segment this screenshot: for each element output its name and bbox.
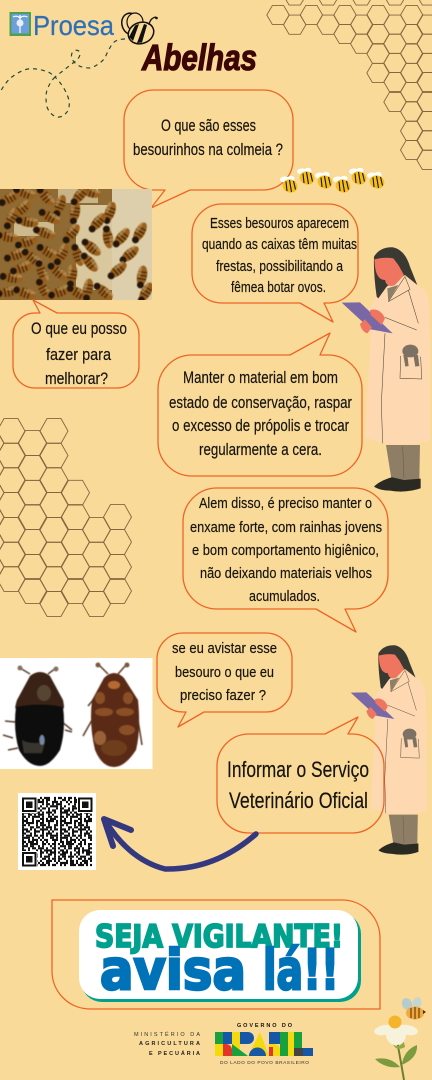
speech bubble: question 2: O que eu posso xyxy=(31,320,127,338)
speech bubble: answer 3: enxame forte, com rainhas jovens xyxy=(190,519,382,536)
speech bubble: answer 1 xyxy=(192,204,358,322)
speech bubble: answer 3: Alem disso, é preciso manter o xyxy=(199,495,372,512)
speech bubble: question 2: fazer para xyxy=(46,346,112,364)
speech bubble: answer 4 xyxy=(217,717,384,833)
speech bubble: answer 4: Informar o Serviço xyxy=(227,757,369,782)
speech bubble: question 3: besouro o que eu xyxy=(175,664,274,681)
speech bubble: answer 2: regularmente a cera. xyxy=(199,441,322,459)
ministry text: AGRICULTURA xyxy=(139,1041,200,1047)
speech bubble: question 3: se eu avistar esse xyxy=(172,640,277,657)
banner slogan: lá!! xyxy=(263,938,339,1002)
speech bubble: answer 3: acumulados. xyxy=(249,588,320,605)
speech bubble: answer 2: Manter o material em bom xyxy=(183,369,338,387)
icon: small bee on flower xyxy=(400,996,426,1020)
speech bubble: question 1 xyxy=(124,90,293,208)
illustration: veterinarian woman 1 xyxy=(342,247,430,492)
speech bubble: answer 2: o excesso de própolis e trocar xyxy=(172,417,349,435)
logo: Governo do Brasil: DO LADO DO POVO BRASILEIRO xyxy=(220,1060,309,1066)
speech bubble: answer 1: Esses besouros aparecem xyxy=(210,215,349,232)
photo: small hive beetle, top and underside xyxy=(0,658,152,769)
ministry text: E PECUÁRIA xyxy=(149,1050,200,1057)
ministry text: MINISTÉRIO DA xyxy=(134,1031,200,1038)
honeycomb left xyxy=(0,419,132,616)
speech bubble: question 2: melhorar? xyxy=(45,370,108,388)
speech bubble: answer 1: quando as caixas têm muitas xyxy=(202,236,357,253)
photo: bees on honeycomb xyxy=(0,189,152,300)
speech bubble: answer 3: não deixando materiais velhos xyxy=(200,565,372,582)
speech bubble: answer 3: e bom comportamento higiênico, xyxy=(192,542,379,559)
speech bubble: question 3: preciso fazer ? xyxy=(180,687,266,704)
banner heading: SEJA VIGILANTE! xyxy=(95,919,343,955)
speech bubble: answer 2 xyxy=(158,333,362,476)
speech bubble: question 1: besourinhos na colmeia ? xyxy=(133,141,283,159)
QR code xyxy=(18,793,96,870)
logo: Governo do Brasil xyxy=(215,1023,313,1066)
icon row: six small bees xyxy=(280,168,386,195)
beetle underside xyxy=(83,662,142,767)
speech bubble: question 2 xyxy=(13,300,139,388)
speech bubble: question 1: O que são esses xyxy=(161,117,256,135)
icon: flower xyxy=(373,1016,419,1080)
speech bubble: answer 3 xyxy=(183,488,388,632)
logo: Proesa: Proesa xyxy=(33,10,114,41)
arrow pointing to QR code xyxy=(104,819,256,869)
banner slogan: avisa xyxy=(100,938,246,1002)
icon: book logo xyxy=(10,12,31,36)
speech bubble: answer 1: frestas, possibilitando a xyxy=(216,258,344,275)
speech bubble: question 3 xyxy=(157,633,292,727)
callout frame: vigilance banner xyxy=(52,900,380,1009)
honeycomb top right xyxy=(267,0,432,170)
speech bubble: answer 2: estado de conservação, raspar xyxy=(169,394,352,412)
dashed bee flight path xyxy=(0,39,125,117)
logo: Governo do Brasil: GOVERNO DO xyxy=(237,1023,293,1029)
speech bubble: answer 1: fêmea botar ovos. xyxy=(231,279,326,296)
title: Abelhas xyxy=(141,37,257,78)
ministry text xyxy=(134,1031,200,1057)
banner xyxy=(79,910,358,999)
banner slogan xyxy=(100,938,339,1002)
beetle top view xyxy=(3,666,72,766)
banner shadow xyxy=(81,913,361,1002)
illustration: veterinarian woman 2 xyxy=(351,645,426,855)
brasil coloured blocks xyxy=(215,1032,313,1056)
speech bubble: answer 4: Veterinário Oficial xyxy=(229,788,368,813)
icon: large bee xyxy=(119,11,158,47)
